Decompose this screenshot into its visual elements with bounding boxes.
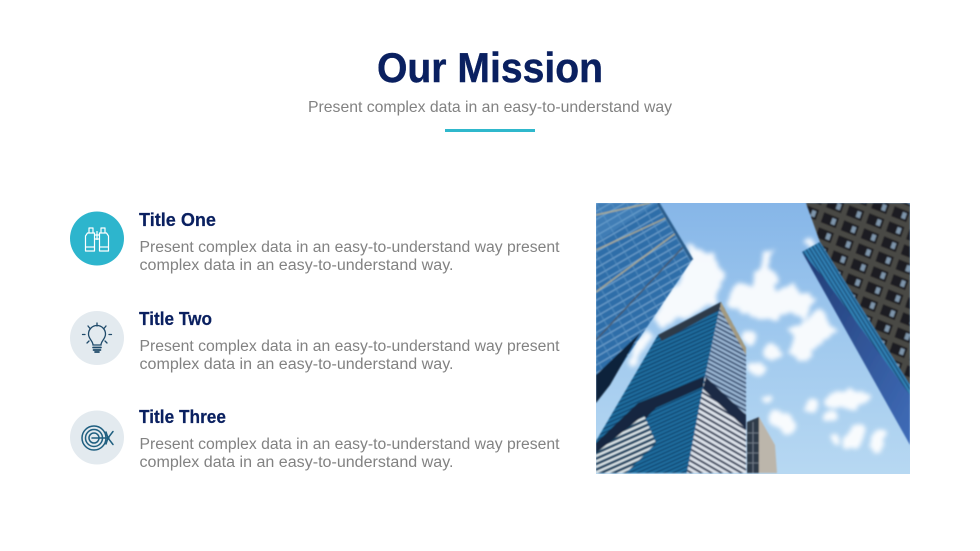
body text bbox=[140, 436, 560, 471]
small rear building bbox=[747, 417, 759, 473]
right dark tower bbox=[806, 203, 910, 385]
left tower bbox=[596, 203, 692, 376]
body text: Present complex data in an easy-to-understand way present bbox=[140, 239, 560, 256]
body text: complex data in an easy-to-understand way. bbox=[140, 454, 454, 471]
heading: Title Two bbox=[139, 308, 212, 329]
icon: binoculars bbox=[70, 212, 124, 266]
heading: Title One bbox=[139, 209, 216, 230]
body text: complex data in an easy-to-understand way. bbox=[140, 356, 454, 373]
body text: Present complex data in an easy-to-understand way present bbox=[140, 436, 560, 453]
subtitle: Present complex data in an easy-to-understand way bbox=[308, 99, 672, 116]
item: Title One bbox=[70, 209, 560, 274]
icon: light bulb bbox=[70, 311, 124, 365]
item: Title Two bbox=[70, 308, 560, 373]
photo: skyscrapers against blue sky bbox=[596, 203, 910, 474]
heading: Title Three bbox=[139, 406, 226, 427]
right blue tower bbox=[802, 242, 910, 445]
body text bbox=[140, 338, 560, 373]
title: Our Mission bbox=[377, 44, 603, 91]
title underline accent bbox=[445, 129, 535, 132]
icon: target with arrow bbox=[70, 410, 124, 464]
central tower left face bbox=[596, 302, 721, 473]
central tower right face bbox=[705, 302, 746, 418]
body text bbox=[140, 239, 560, 274]
body text: complex data in an easy-to-understand way. bbox=[140, 257, 454, 274]
item: Title Three bbox=[70, 406, 560, 471]
body text: Present complex data in an easy-to-understand way present bbox=[140, 338, 560, 355]
